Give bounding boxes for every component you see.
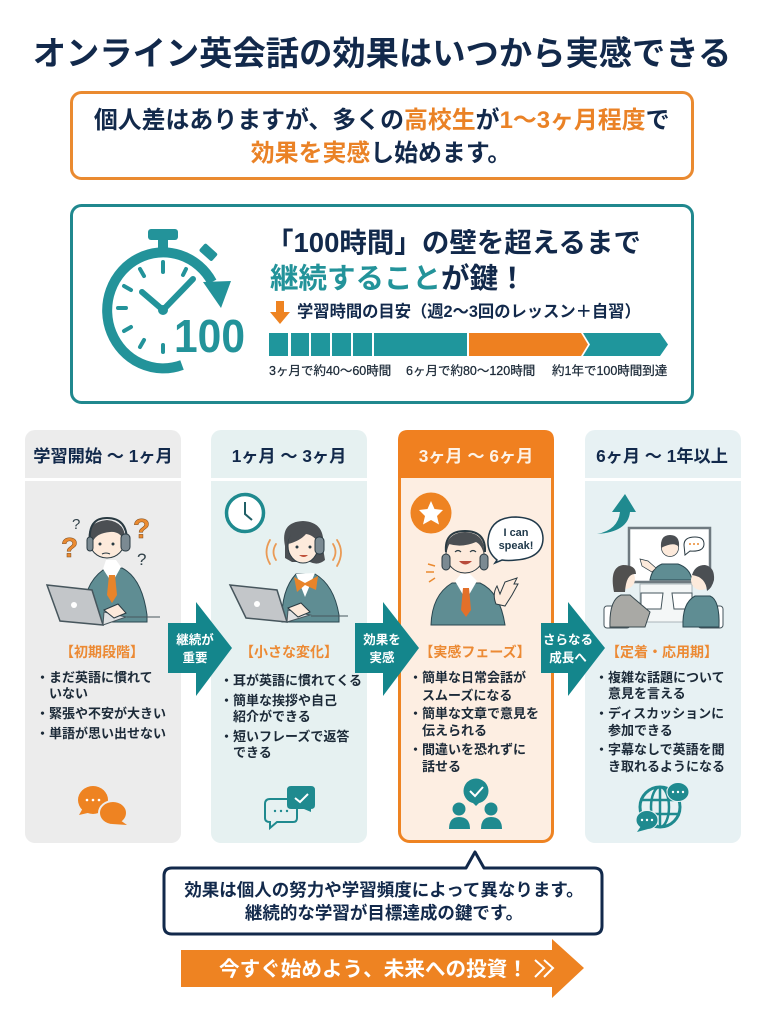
callout: 効果は個人の努力や学習頻度によって異なります。 xyxy=(184,880,584,900)
illustration: confident student xyxy=(410,492,543,625)
arrow: further growth: さらなる xyxy=(543,633,593,647)
stage 3 bullets: 話せる xyxy=(422,759,461,774)
icon: chat with check xyxy=(265,786,315,828)
icon: globe with chat xyxy=(636,782,689,832)
speech bubble: speak! xyxy=(499,540,533,552)
arrow: feel the effect: 実感 xyxy=(369,650,395,665)
bar labels xyxy=(269,363,668,378)
illustration: confused student xyxy=(47,513,160,625)
callout xyxy=(164,852,602,934)
bar labels: 6ヶ月で約80〜120時間 xyxy=(406,363,535,378)
arrow: continuity matters xyxy=(168,602,232,696)
arrow: further growth xyxy=(541,602,605,696)
table xyxy=(640,584,692,622)
panel: stage 3 highlighted xyxy=(398,430,554,842)
stage 1 bullets: ・緊張や不安が大きい xyxy=(36,706,166,721)
stage 2 period: 1ヶ月 〜 3ヶ月 xyxy=(232,446,346,466)
stage 2 bullets: ・簡単な挨拶や自己 xyxy=(220,693,337,708)
call to action arrow xyxy=(181,939,584,998)
icon: stopwatch: 100 xyxy=(174,310,245,362)
illustration: confused student: ? xyxy=(72,516,80,533)
panel: summary xyxy=(72,92,692,178)
stage 4 period: 6ヶ月 〜 1年以上 xyxy=(596,446,728,466)
stage 4 bullets: き取れるようになる xyxy=(608,759,725,774)
icon: orange down arrow xyxy=(270,301,290,324)
call to action arrow: 今すぐ始めよう、未来への投資！ xyxy=(219,958,528,981)
illustration: speaking student with clock xyxy=(226,494,348,622)
stage 1 period: 学習開始 〜 1ヶ月 xyxy=(33,446,173,466)
bar labels: 3ヶ月で約40〜60時間 xyxy=(269,363,391,378)
speech bubble: I can xyxy=(503,527,529,539)
panel: stage 1 xyxy=(25,430,181,843)
stage 3 label: 【実感フェーズ】 xyxy=(419,644,531,660)
arrow: further growth: 成長へ xyxy=(549,650,587,665)
icon: people with check xyxy=(449,778,502,829)
stage 3 bullets: ・簡単な日常会話が xyxy=(409,670,526,685)
progress bar xyxy=(269,333,668,356)
stage 3 bullets: スムーズになる xyxy=(422,688,512,703)
summary text: 効果を実感し始めます。 xyxy=(251,140,511,167)
arrow: feel the effect xyxy=(355,602,419,696)
guideline text: 学習時間の目安（週2〜3回のレッスン＋自習） xyxy=(297,302,641,321)
panel: stage 2 xyxy=(211,430,367,843)
stage 1 bullets: ・単語が思い出せない xyxy=(36,726,166,741)
stage 2 bullets: 紹介ができる xyxy=(233,709,311,724)
stage 1 bullets: ・まだ英語に慣れて xyxy=(36,670,153,685)
summary text: 個人差はありますが、多くの高校生が1〜3ヶ月程度で xyxy=(94,107,670,134)
illustration: confused student: ? xyxy=(61,532,78,563)
stage 4 bullets: 意見を言える xyxy=(608,686,686,701)
heading: 100 hours: 「100時間」の壁を超えるまで xyxy=(266,227,641,258)
icon: stopwatch xyxy=(107,229,245,368)
speech bubble xyxy=(488,517,543,563)
stage 2 bullets: ・耳が英語に慣れてくる xyxy=(220,673,362,688)
stage 1 bullets: いない xyxy=(49,686,88,701)
stage 3 bullets: ・間違いを恐れずに xyxy=(409,742,526,757)
stage 2 bullets: できる xyxy=(233,745,272,760)
stage 3 bullets: 伝えられる xyxy=(422,723,487,738)
stage 4 bullets: ・字幕なしで英語を聞 xyxy=(595,742,725,757)
stage 3 bullets: ・簡単な文章で意見を xyxy=(409,706,539,721)
stage 4 bullets: 参加できる xyxy=(608,723,673,738)
panel: 100 hours xyxy=(72,206,692,402)
stage 2 bullets: ・短いフレーズで返答 xyxy=(220,729,349,744)
title: オンライン英会話の効果はいつから実感できる xyxy=(33,36,731,73)
stage 4 bullets: ・複雑な話題について xyxy=(595,670,725,685)
icon: orange chat bubbles xyxy=(78,786,127,825)
arrow: continuity matters: 継続が xyxy=(176,632,214,647)
callout: 継続的な学習が目標達成の鍵です。 xyxy=(245,903,523,923)
stage 2 label: 【小さな変化】 xyxy=(240,644,338,660)
arrow: feel the effect: 効果を xyxy=(363,633,401,647)
illustration: video meeting xyxy=(597,494,723,628)
illustration: confused student: ? xyxy=(137,550,146,569)
panel: stage 4 xyxy=(585,430,741,843)
illustration: confused student: ? xyxy=(133,513,150,544)
heading: continuity: 継続することが鍵！ xyxy=(270,262,527,295)
bar labels: 約1年で100時間到達 xyxy=(552,363,668,378)
stage 1 label: 【初期段階】 xyxy=(60,644,144,660)
stage 3 period: 3ヶ月 〜 6ヶ月 xyxy=(419,446,533,466)
stage 4 bullets: ・ディスカッションに xyxy=(595,706,724,721)
stage 4 label: 【定着・応用期】 xyxy=(606,644,718,660)
arrow: continuity matters: 重要 xyxy=(182,650,208,665)
